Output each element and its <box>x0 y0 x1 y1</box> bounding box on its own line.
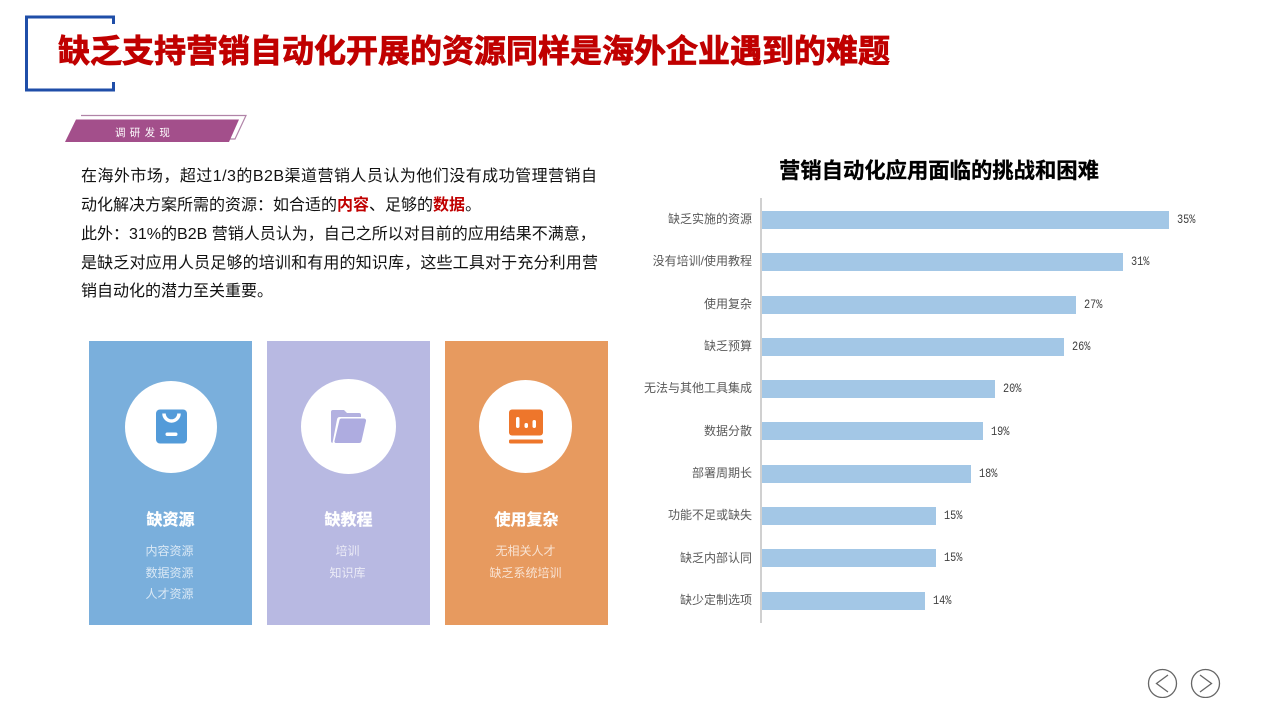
bar chart: 缺乏预算 <box>704 339 752 353</box>
chart title: 营销自动化应用面临的挑战和困难 <box>779 159 1099 183</box>
bar chart: 19% <box>991 424 1009 438</box>
list: 内容资源 <box>145 544 194 558</box>
title: 缺乏支持营销自动化开展的资源同样是海外企业遇到的难题 <box>58 33 890 69</box>
list: 培训 <box>335 544 360 558</box>
list <box>145 544 194 601</box>
intro text block: 在海外市场，超过1/3的B2B渠道营销人员认为他们没有成功管理营销自 <box>81 168 597 185</box>
intro text block: 动化解决方案所需的资源：如合适的内容、足够的数据。 <box>81 197 481 214</box>
list: 人才资源 <box>145 587 194 601</box>
bar chart: 使用复杂 <box>704 297 752 311</box>
intro text block <box>81 167 598 300</box>
list <box>489 544 562 580</box>
icon: chart screen <box>479 380 572 473</box>
panel: lack of resources <box>89 341 252 625</box>
list <box>329 544 366 580</box>
bar chart: 数据分散 <box>704 424 752 438</box>
bar chart: 缺乏内部认同 <box>680 551 752 565</box>
bar chart: 31% <box>1131 255 1149 269</box>
list: 数据资源 <box>145 566 194 580</box>
intro text block: 销自动化的潜力至关重要。 <box>81 283 273 300</box>
bar chart: 缺乏实施的资源 <box>668 212 752 226</box>
list: 缺乏系统培训 <box>489 566 562 580</box>
bar chart: 缺少定制选项 <box>680 593 752 607</box>
heading: 使用复杂 <box>494 512 558 529</box>
bar chart: 35% <box>1177 212 1195 226</box>
intro text block: 是缺乏对应用人员足够的培训和有用的知识库，这些工具对于充分利用营 <box>81 255 598 272</box>
bar chart: 没有培训/使用教程 <box>653 254 752 268</box>
bar chart: 部署周期长 <box>692 466 752 480</box>
bar chart: 14% <box>933 594 951 608</box>
icon: next arrow <box>1190 668 1220 698</box>
bar chart: 无法与其他工具集成 <box>644 381 752 395</box>
icon: folder <box>301 379 396 474</box>
icon: resource tablet <box>125 381 217 473</box>
icon: previous arrow <box>1148 668 1178 698</box>
bar chart: 26% <box>1072 340 1090 354</box>
tag: survey findings <box>65 114 247 142</box>
bar chart <box>644 198 1196 623</box>
panel: complex to use <box>445 341 608 625</box>
bar chart: 功能不足或缺失 <box>668 508 752 522</box>
title bracket <box>25 16 115 92</box>
heading: 缺资源 <box>146 512 194 529</box>
bar chart: 15% <box>944 551 962 565</box>
bar chart: 15% <box>944 509 962 523</box>
panel: lack of tutorials <box>267 341 430 625</box>
list: 知识库 <box>329 566 366 580</box>
bar chart: 18% <box>979 466 997 480</box>
intro text block: 此外：31%的B2B 营销人员认为，自己之所以对目前的应用结果不满意， <box>81 226 596 243</box>
bar chart: 20% <box>1003 382 1021 396</box>
tag: survey findings: 调研发现 <box>115 127 174 139</box>
heading: 缺教程 <box>324 512 372 529</box>
bar chart: 27% <box>1084 298 1102 312</box>
list: 无相关人才 <box>495 544 556 558</box>
